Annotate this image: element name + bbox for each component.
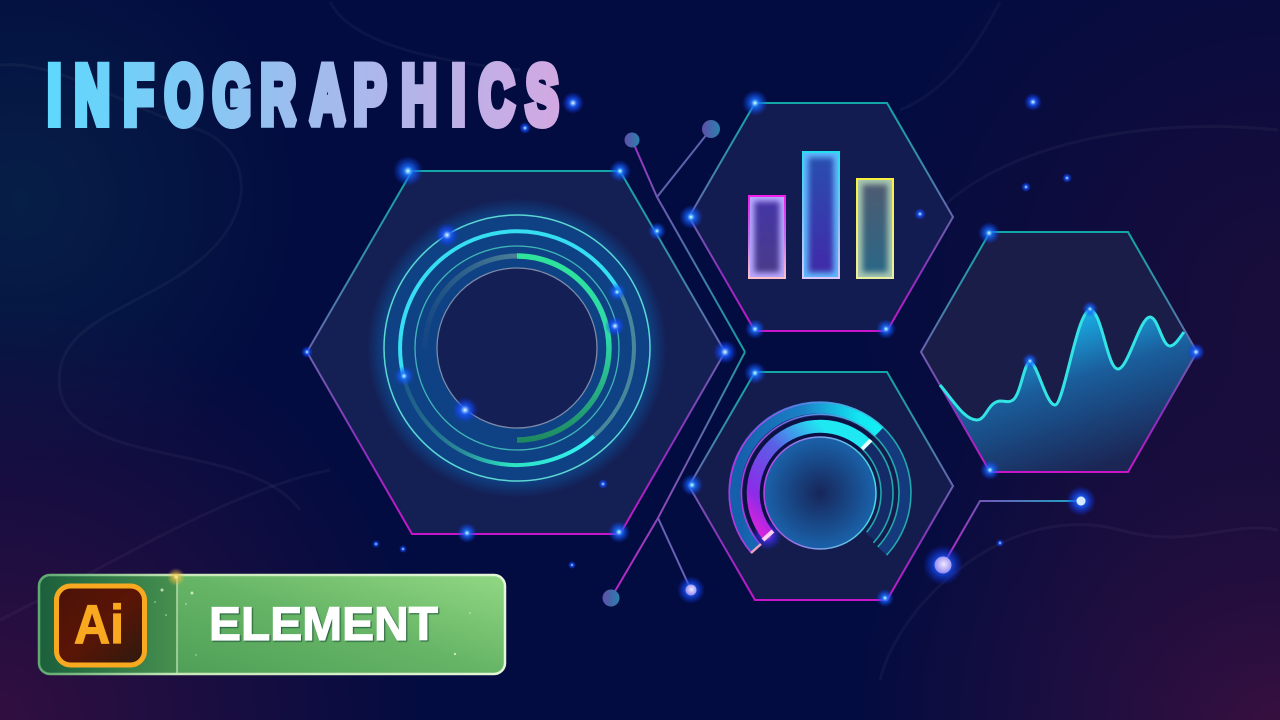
divider	[176, 575, 178, 674]
bar chart	[748, 151, 894, 279]
divider spark	[167, 568, 185, 586]
badge label: ELEMENT	[209, 597, 438, 650]
glowing light points	[301, 90, 1205, 607]
panel: gauge hexagon	[689, 372, 953, 600]
badge right section	[177, 575, 505, 674]
connector elbow at lower right	[943, 501, 1081, 565]
badge border	[39, 575, 505, 674]
badge left section	[39, 575, 177, 674]
panel: area chart hexagon	[921, 232, 1197, 472]
ring chart	[367, 198, 667, 498]
area chart line	[940, 310, 1184, 420]
speckles	[154, 588, 471, 656]
panel: large hexagon with ring chart	[307, 171, 725, 534]
area chart fill	[940, 310, 1197, 472]
title: INFOGRAPHICS	[48, 50, 558, 141]
hexagon outline	[921, 232, 1197, 472]
connector end nodes	[602, 120, 1096, 606]
panel: bar chart hexagon	[689, 103, 953, 331]
badge: Ai element	[39, 568, 505, 674]
gauge dial	[729, 402, 911, 555]
icon: Adobe Illustrator	[56, 586, 144, 665]
icon: Adobe Illustrator: Ai	[74, 593, 124, 655]
connector lines: central chevron with branches	[611, 129, 745, 598]
